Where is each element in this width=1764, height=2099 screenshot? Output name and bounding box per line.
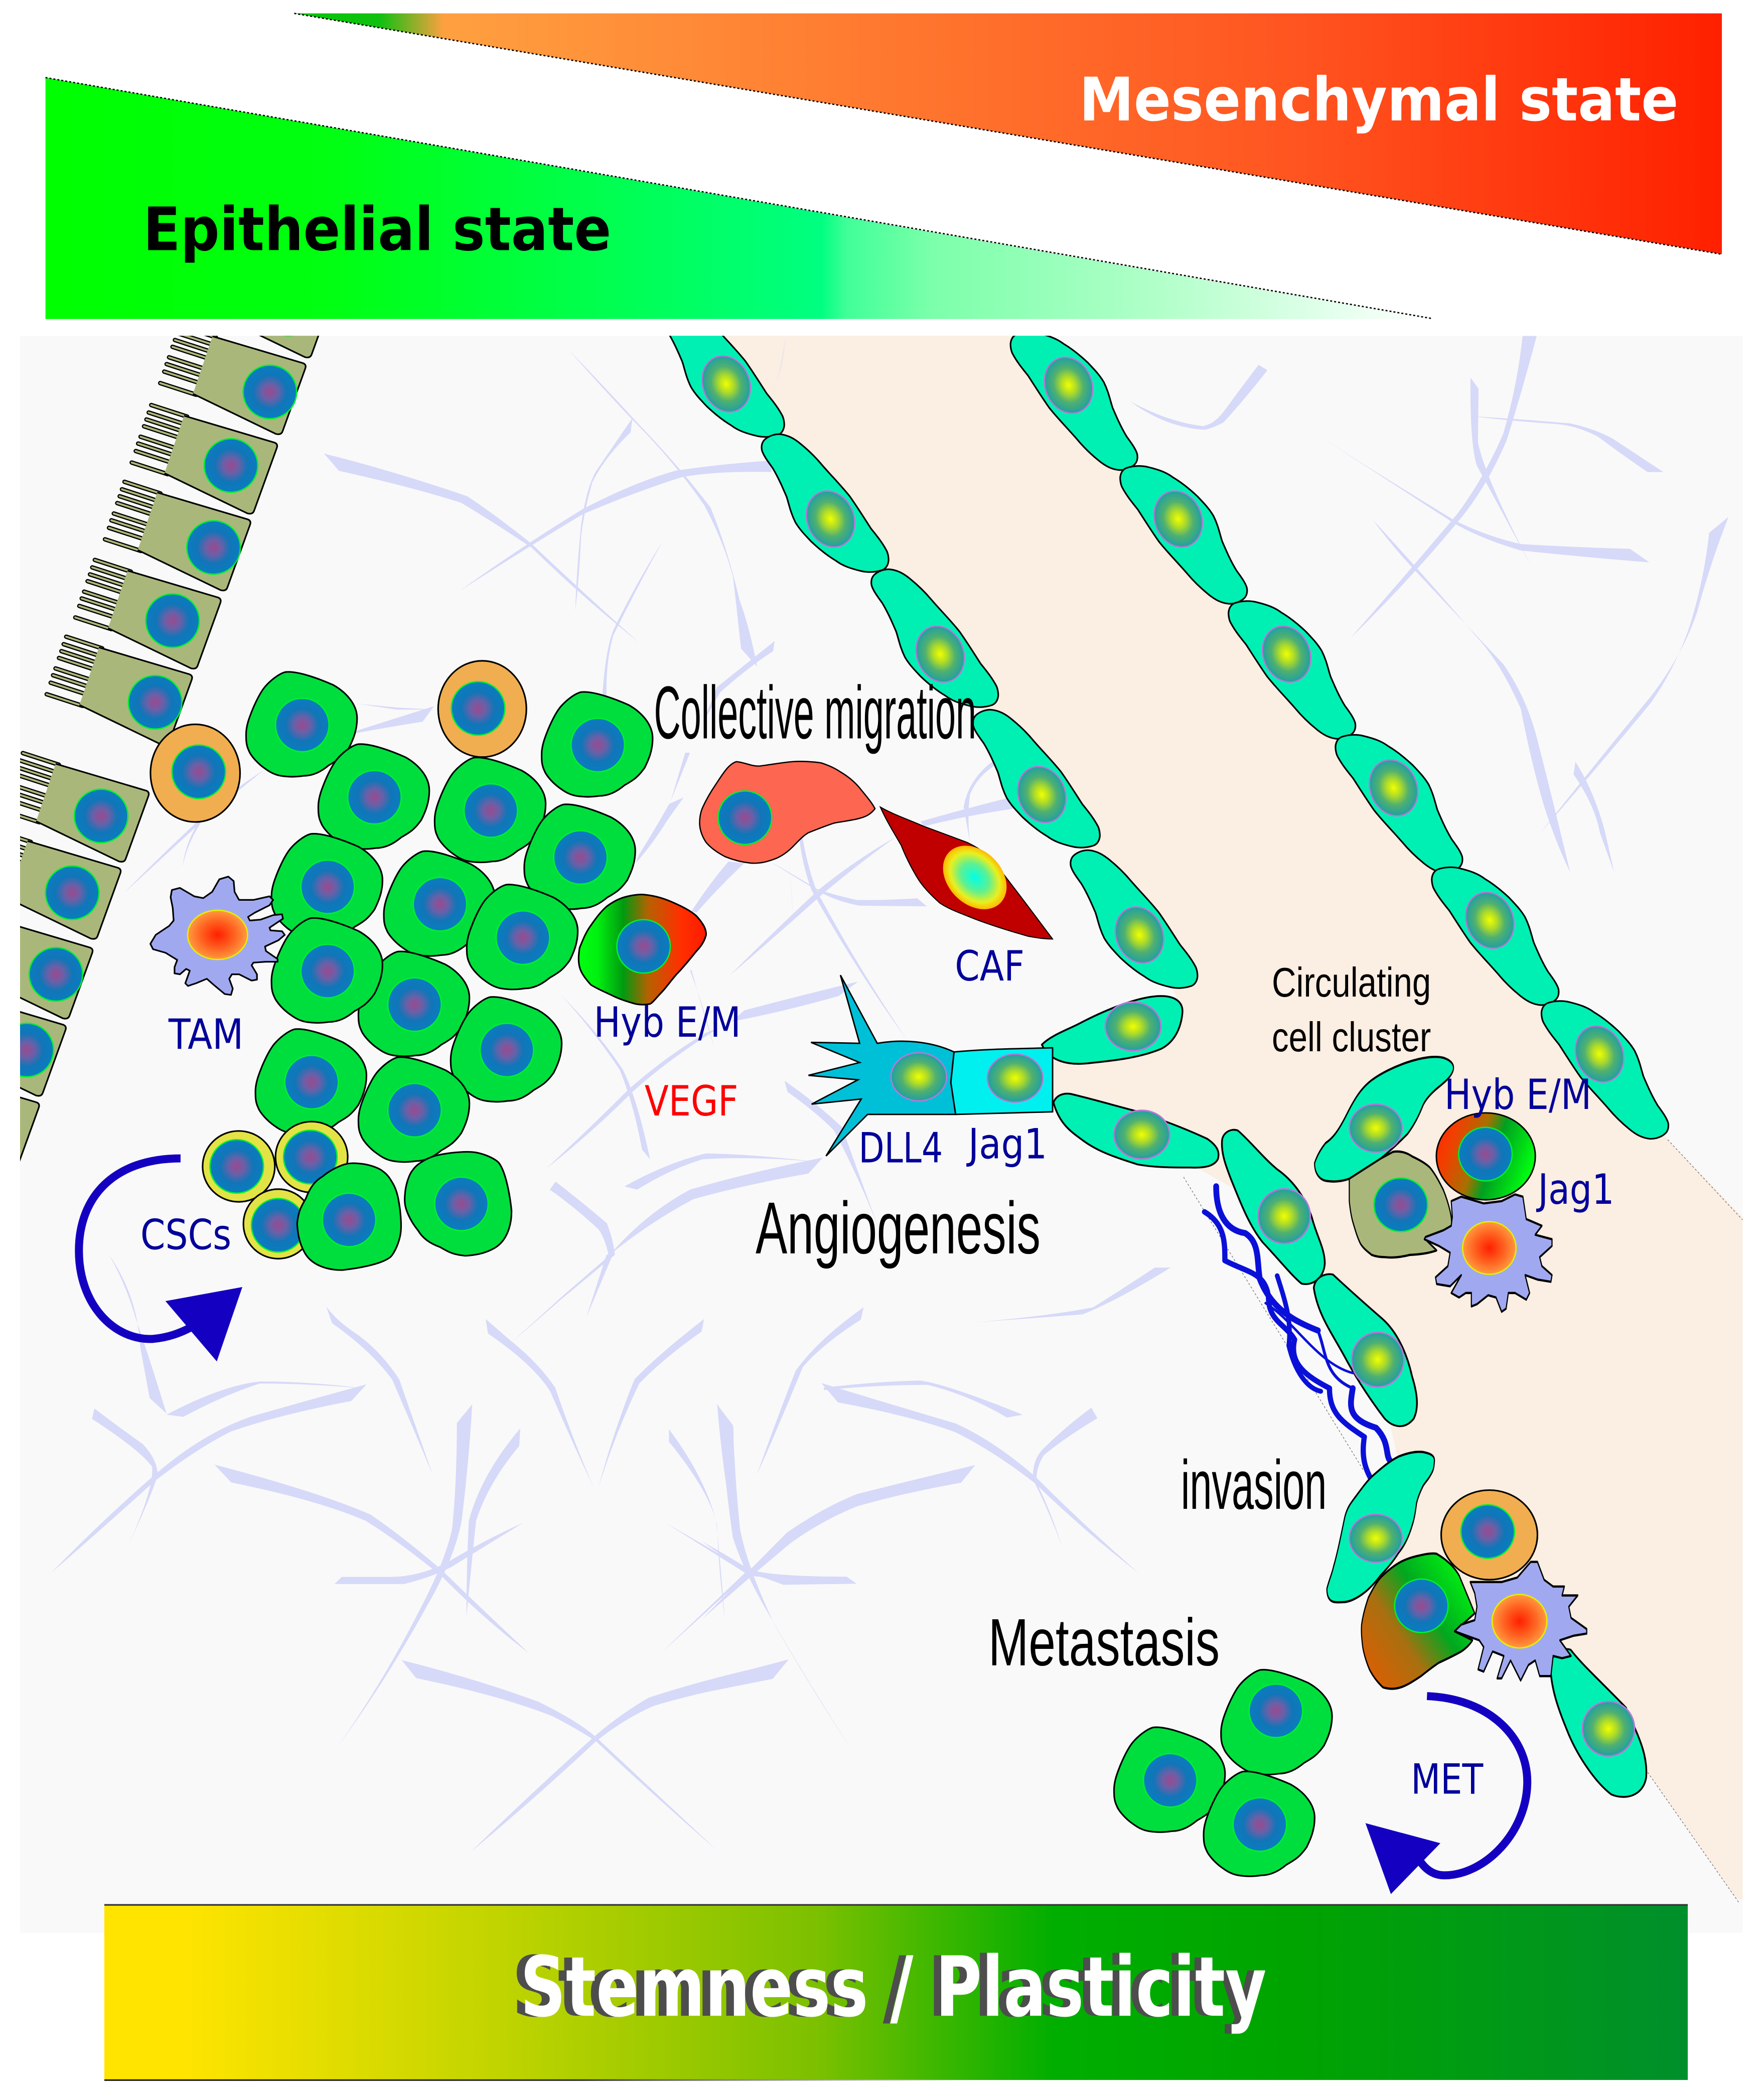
epithelial cell	[0, 987, 66, 1096]
hybrid E/M cell in cluster	[1436, 1113, 1535, 1200]
epithelial cell	[0, 1065, 39, 1173]
cancer stem cells	[203, 1122, 348, 1258]
faint fiber inside lumen	[772, 339, 785, 398]
tumor cell	[246, 672, 357, 777]
label: TAM: TAM	[168, 1011, 243, 1059]
label: Jag1: Jag1	[966, 1120, 1047, 1168]
label: invasion: invasion	[1181, 1447, 1327, 1524]
blood vessel lumen	[722, 336, 1742, 1899]
endothelial cell	[871, 570, 998, 707]
heading: stemness / plasticity: Stemness / Plasticity	[520, 1939, 1266, 2035]
hybrid E/M cell	[578, 895, 706, 1005]
heading: mesenchymal state: Mesenchymal state	[1079, 65, 1678, 135]
stem cell	[275, 1122, 348, 1192]
label: circulating cell cluster: cell cluster	[1272, 1014, 1431, 1060]
tumor cell	[1114, 1727, 1225, 1832]
endothelial cell	[1432, 867, 1559, 1005]
endothelium: right vessel wall	[1010, 332, 1668, 1139]
leader cell: collective migration	[699, 761, 875, 863]
label: CAF: CAF	[955, 942, 1024, 991]
tumor cell	[388, 1129, 535, 1277]
endothelial cell	[1071, 850, 1198, 988]
top gradient: mesenchymal state wedge	[294, 14, 1722, 254]
orange immune cell	[438, 661, 526, 757]
label: metastasis: Metastasis	[988, 1605, 1220, 1680]
label: CSCs: CSCs	[140, 1211, 231, 1260]
tumor cell	[271, 833, 382, 939]
endothelial-like cell in cluster	[1314, 1057, 1453, 1182]
stem cell	[203, 1131, 275, 1202]
endothelial cell near branch	[1042, 996, 1183, 1064]
tumor cell	[1221, 1670, 1332, 1775]
invasion matrix-degrading waves	[1205, 1186, 1391, 1479]
label: Hyb E/M in cluster: Hyb E/M	[1444, 1071, 1591, 1119]
endothelial cell	[1010, 332, 1137, 470]
tumor cell	[318, 744, 429, 849]
cancer-associated fibroblast	[880, 807, 1053, 939]
endothelial cell distal	[1550, 1649, 1647, 1797]
label: MET: MET	[1411, 1756, 1484, 1804]
circulating cell cluster	[1314, 1057, 1552, 1312]
Jag1 stalk cell	[951, 1048, 1053, 1114]
metastatic colony	[1114, 1670, 1332, 1876]
tumor cell	[271, 918, 382, 1023]
endothelial cell at invasion front	[1314, 1274, 1417, 1426]
label: VEGF: VEGF	[645, 1077, 738, 1126]
endothelial cell	[973, 710, 1100, 848]
epithelial cell	[0, 830, 121, 939]
endothelial cell	[657, 299, 784, 437]
tumor cell	[358, 951, 470, 1056]
label: angiogenesis: Angiogenesis	[756, 1187, 1041, 1270]
tumor cell beside stem cells	[275, 1147, 424, 1293]
endothelium: left vessel wall	[657, 299, 1647, 1797]
metastatic niche: orange immune cell	[1441, 1490, 1537, 1580]
endothelial cell	[1120, 466, 1247, 604]
tumor cell	[451, 997, 562, 1102]
angiogenic tip cell	[808, 975, 956, 1156]
heading: epithelial state: Epithelial state	[143, 195, 611, 264]
endothelial cell near branch	[1054, 1093, 1219, 1168]
arrow: MET	[1366, 1696, 1527, 1894]
tumor-associated macrophage	[151, 877, 285, 995]
tumor cell	[1204, 1771, 1314, 1876]
tumor cell	[542, 692, 653, 797]
label: circulating cell cluster	[1272, 959, 1431, 1060]
epithelial cell	[4, 753, 149, 862]
heading: stemness / plasticity: Stemness / Plasticity	[512, 1939, 1260, 2035]
epithelial cell	[75, 560, 221, 668]
label: DLL4: DLL4	[858, 1124, 943, 1172]
arrow: CSC self-renewal	[79, 1158, 242, 1361]
tumor cell	[467, 885, 578, 990]
endothelial cell at invasion front	[1222, 1130, 1325, 1284]
epithelial cell	[105, 482, 250, 591]
endothelial cell	[1229, 601, 1356, 739]
primary tumor: epithelial cells	[246, 672, 653, 1277]
endothelial cell	[1336, 735, 1462, 873]
normal epithelium: upper segment	[44, 336, 319, 744]
epithelial cell in cluster	[1349, 1152, 1452, 1257]
epithelial cell	[47, 637, 192, 745]
endothelial cell at metastatic exit	[1327, 1452, 1434, 1602]
extracellular matrix fibers	[51, 336, 1728, 1852]
tumor cell	[255, 1029, 366, 1134]
metastatic niche: macrophage	[1454, 1562, 1587, 1681]
tumor cell	[524, 804, 635, 909]
label: Jag1 in cluster: Jag1	[1536, 1166, 1614, 1214]
label: circulating cell cluster: Circulating	[1272, 959, 1431, 1006]
panel: tissue background	[20, 336, 1742, 1933]
top gradient: epithelial state wedge	[46, 78, 1431, 319]
macrophage in cluster	[1424, 1194, 1552, 1312]
vessel hairline edges	[1184, 1140, 1742, 1902]
tumor cell	[358, 1057, 470, 1162]
epithelial cell	[132, 405, 277, 514]
label: Hyb E/M: Hyb E/M	[594, 999, 741, 1047]
epithelial cell	[259, 336, 319, 358]
text: Collective migration	[654, 670, 976, 754]
endothelial cell	[762, 434, 889, 572]
normal epithelium: lower segment	[20, 751, 150, 1162]
epithelial cell	[0, 910, 93, 1019]
epithelial cell	[160, 326, 306, 434]
orange immune cell	[151, 724, 240, 822]
tumor cell	[384, 851, 495, 956]
endothelial cell	[1541, 1001, 1668, 1139]
stem cell	[243, 1189, 313, 1258]
metastatic niche: hybrid cell	[1362, 1554, 1475, 1689]
bottom gradient bar: stemness / plasticity	[104, 1904, 1688, 2081]
tumor cell	[434, 758, 546, 863]
